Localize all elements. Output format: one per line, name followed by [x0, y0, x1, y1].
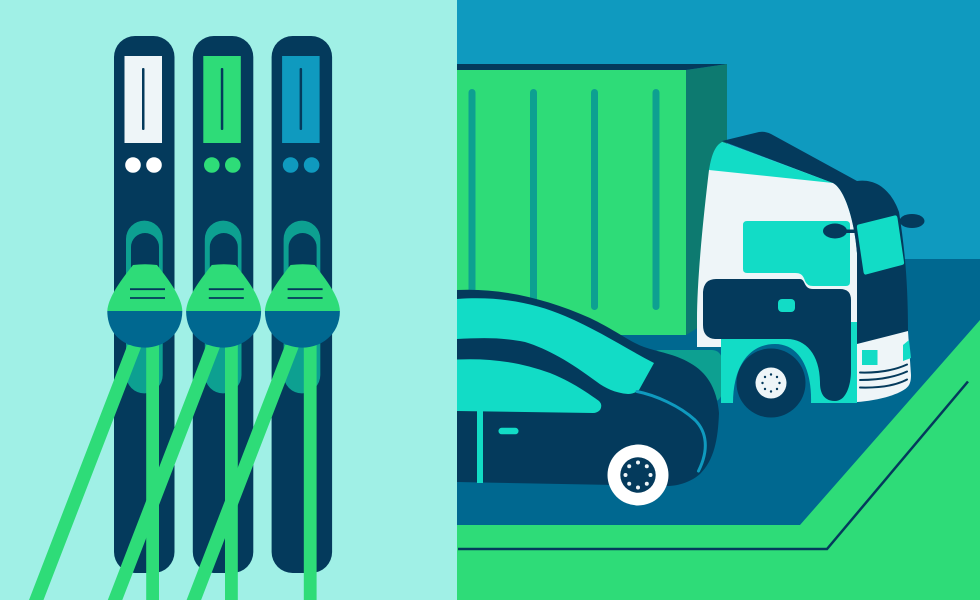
- truck wheel: [736, 348, 806, 418]
- wheel arch: [733, 344, 811, 403]
- charging pump 3: [187, 36, 340, 600]
- cab white body: [697, 142, 857, 403]
- panel: vehicles scene: [457, 0, 980, 600]
- door line: [477, 411, 483, 483]
- car door handle: [498, 428, 518, 434]
- truck fender behind car: [650, 350, 722, 402]
- car body: [457, 290, 719, 486]
- left mirror: [823, 224, 857, 238]
- trailer: [457, 64, 727, 335]
- door handle: [778, 299, 795, 312]
- bumper: [857, 331, 911, 402]
- road edge line: [458, 382, 968, 549]
- hood line: [637, 392, 705, 471]
- car side window: [457, 359, 601, 413]
- car: [457, 290, 719, 506]
- car windscreen: [457, 298, 654, 394]
- front navy cab and roof: [722, 132, 908, 344]
- side window: [743, 221, 850, 286]
- cab door: [703, 279, 851, 401]
- roof visor: [709, 142, 833, 183]
- windshield: [857, 215, 904, 275]
- car wheel: [608, 444, 668, 506]
- green road: [457, 320, 980, 600]
- truck cab: [697, 132, 924, 418]
- charging pump 2: [108, 36, 261, 600]
- panel: charging stations: [0, 0, 457, 600]
- charging pump 1: [29, 36, 182, 600]
- right mirror: [900, 214, 924, 228]
- cab lower teal panel: [721, 322, 857, 403]
